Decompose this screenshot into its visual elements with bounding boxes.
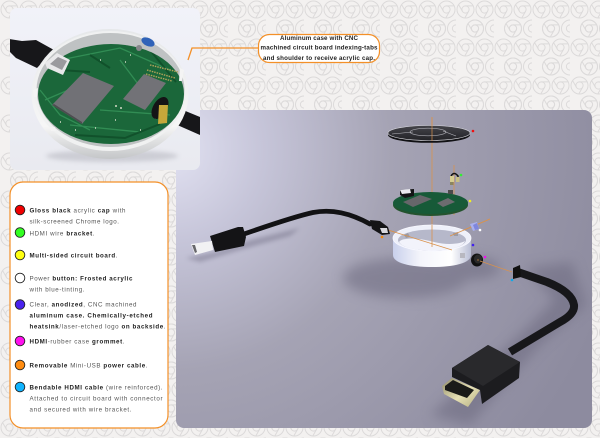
photo brass grommet connector <box>152 97 168 124</box>
photo wall tabs <box>36 70 182 128</box>
exploded assembly axes <box>388 117 490 250</box>
legend item: circuit board: Multi-sided circuit board. <box>30 252 118 260</box>
legend item: HDMI cable: and secured with wire bracket. <box>30 406 132 414</box>
mini-USB plug <box>370 220 390 235</box>
legend item: grommet: HDMI-rubber case grommet. <box>30 338 125 346</box>
part marker dots <box>381 130 513 281</box>
legend item: aluminum case <box>15 300 166 330</box>
part: multi-sided circuit board <box>393 189 468 216</box>
panel: exploded render <box>176 110 592 428</box>
legend item: grommet <box>15 336 125 346</box>
callout <box>258 34 380 62</box>
panel: legend <box>10 182 168 428</box>
legend item: acrylic cap: silk-screened Chrome logo. <box>30 218 119 226</box>
legend item: wire bracket <box>15 228 95 238</box>
part: HDMI rubber grommet <box>471 254 512 272</box>
legend item: acrylic cap <box>15 205 126 226</box>
legend item: power button <box>15 273 133 294</box>
panel: case photo <box>9 8 200 170</box>
mini connector on board <box>400 189 414 198</box>
legend item: power cable <box>15 360 148 370</box>
legend item: power button: with blue-tinting. <box>28 286 85 294</box>
photo grey studs <box>136 45 142 51</box>
photo large chip <box>52 73 114 124</box>
photo right cable <box>178 111 200 135</box>
part: aluminum case <box>388 219 490 267</box>
legend item: power cable: Removable Mini-USB power cable. <box>30 362 148 370</box>
legend item: aluminum case: heatsink/laser-etched logo on backside. <box>30 324 166 330</box>
photo case shadow <box>46 150 178 162</box>
legend item: aluminum case: aluminum case. Chemically-etched <box>30 312 153 320</box>
part: frosted power button <box>470 222 479 231</box>
USB plug <box>191 227 246 255</box>
photo white connector <box>45 53 70 75</box>
callout: and shoulder to receive acrylic cap. <box>263 55 375 62</box>
legend item: HDMI cable: Attached to circuit board with connector <box>30 396 162 402</box>
legend item: power button: Power button: Frosted acrylic <box>30 276 133 282</box>
callout: machined circuit board indexing-tabs <box>260 44 378 52</box>
part: mini-USB cable <box>186 211 390 262</box>
HDMI connector <box>442 345 520 407</box>
floor shadows <box>343 256 586 425</box>
photo case body <box>32 29 188 159</box>
part: bendable HDMI cable <box>442 265 574 407</box>
callout: Aluminum case with CNC <box>280 35 359 42</box>
callout leader line <box>188 48 258 60</box>
legend item: circuit board <box>15 250 118 260</box>
legend item: wire bracket: HDMI wire bracket. <box>30 230 95 238</box>
photo small chip <box>123 74 166 110</box>
part: HDMI wire bracket <box>450 174 460 185</box>
photo gold contact rows <box>146 65 178 81</box>
legend item: aluminum case: Clear, anodized, CNC machined <box>30 302 137 308</box>
legend item: acrylic cap: Gloss black acrylic cap with <box>30 208 126 214</box>
photo blue button <box>141 37 155 47</box>
photo left cable <box>9 39 54 68</box>
legend item: HDMI cable <box>15 382 163 414</box>
legend item: HDMI cable: Bendable HDMI cable (wire reinforced). <box>30 384 163 392</box>
part: gloss black acrylic cap <box>388 117 470 143</box>
